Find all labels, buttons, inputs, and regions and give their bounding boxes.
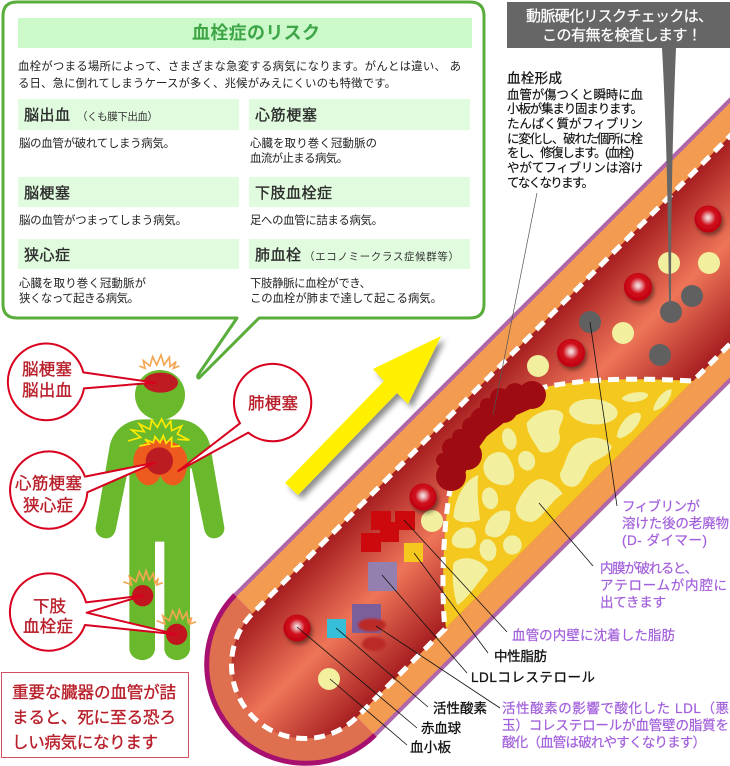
item: myocardial infarction: 心臓を取り巻く冠動脈の xyxy=(250,136,377,150)
vessel wall xyxy=(235,95,730,735)
label: atheroma: 内膜が破れると、 xyxy=(600,561,698,576)
label: deposited fat: 血管の内壁に沈着した脂肪 xyxy=(512,627,675,643)
label: oxidized LDL: 玉）コレステロールが血管壁の脂質を xyxy=(502,718,729,733)
damage mark xyxy=(358,618,386,651)
intro text xyxy=(18,59,461,90)
item: myocardial infarction xyxy=(249,99,470,165)
item: lower limb thrombosis xyxy=(249,177,470,227)
callout bubble: cerebral: 脳出血 xyxy=(22,381,72,400)
text: thrombus formation: 血栓形成 xyxy=(507,71,562,86)
text: thrombus formation: たんぱく質がフィブリン xyxy=(507,116,643,131)
label: fibrin waste: (D- ダイマー) xyxy=(622,533,707,548)
callout bubble: heart: 狭心症 xyxy=(23,496,73,515)
red blood cells xyxy=(284,206,722,642)
leg lesion upper xyxy=(132,585,153,606)
callout bubble: heart: 心筋梗塞 xyxy=(15,474,82,493)
neutral fat squares xyxy=(361,511,415,552)
item: cerebral hemorrhage: 脳の血管が破れてしまう病気。 xyxy=(19,136,175,150)
leg lesion lower xyxy=(166,624,187,645)
atheroma plaque xyxy=(443,379,693,628)
text: thrombus formation xyxy=(507,71,643,190)
label: active oxygen: 活性酸素 xyxy=(433,701,487,716)
item: cerebral infarction xyxy=(18,177,239,227)
upper leg burst xyxy=(123,571,163,585)
outer edge lower xyxy=(375,375,730,735)
item: cerebral hemorrhage xyxy=(18,99,239,150)
callout bubble: legs: 血栓症 xyxy=(23,617,73,636)
fat deposits xyxy=(452,389,672,605)
leader lines xyxy=(297,322,617,745)
lungs xyxy=(133,440,187,485)
lumen xyxy=(231,131,730,739)
lower leg burst xyxy=(157,610,196,624)
intro text: る日、急に倒れてしまうケースが多く、兆候がみえにくいのも特徴です。 xyxy=(18,76,396,90)
warning box: しい病気になります xyxy=(12,733,158,752)
label: oxidized LDL: 活性酸素の影響で酸化した LDL（悪 xyxy=(502,701,729,716)
item: angina: 狭くなって起きる病気。 xyxy=(19,291,139,305)
label: LDL cholesterol: LDLコレステロール xyxy=(471,670,595,685)
item: cerebral hemorrhage: 脳出血 xyxy=(24,107,70,124)
chest burst outer xyxy=(128,419,189,441)
item: myocardial infarction: 心筋梗塞 xyxy=(255,107,317,124)
label: fibrin waste: 溶けた後の老廃物 xyxy=(622,516,729,531)
callout bubble: heart xyxy=(10,451,155,529)
thrombus leader line xyxy=(493,193,537,415)
item: cerebral hemorrhage: （くも膜下出血） xyxy=(77,110,158,123)
grey callout: artery check: この有無を検査します！ xyxy=(542,27,702,44)
head xyxy=(135,370,185,420)
label: atheroma xyxy=(600,561,727,610)
grey callout: artery check xyxy=(507,2,730,305)
chest burst inner xyxy=(139,436,180,447)
heart lesion xyxy=(146,447,173,475)
body xyxy=(96,419,224,660)
heading bar xyxy=(18,18,472,48)
callout bubble: lung: 肺梗塞 xyxy=(248,394,298,413)
item: pulmonary embolism: この血栓が肺まで達して起こる病気。 xyxy=(250,291,442,305)
label: neutral fat: 中性脂肪 xyxy=(494,649,547,664)
thrombus xyxy=(436,381,546,491)
item: pulmonary embolism: 肺血栓 xyxy=(255,247,301,264)
item: pulmonary embolism: 下肢静脈に血栓ができ、 xyxy=(250,276,371,290)
outer edge upper xyxy=(235,95,730,595)
panel outline with speech tail xyxy=(3,2,484,378)
text: thrombus formation: やがてフィブリンは溶け xyxy=(507,160,643,175)
heading: 血栓症のリスク xyxy=(192,23,320,43)
item: cerebral infarction: 脳の血管がつまってしまう病気。 xyxy=(19,213,187,227)
label: red blood cell: 赤血球 xyxy=(421,721,462,736)
item: lower limb thrombosis: 足への血管に詰まる病気。 xyxy=(250,213,383,227)
active oxygen square xyxy=(327,619,346,638)
LDL cholesterol square xyxy=(368,562,397,591)
head burst xyxy=(139,355,179,368)
item: angina xyxy=(18,239,239,305)
item: pulmonary embolism xyxy=(249,239,470,305)
brain lesion xyxy=(143,373,178,393)
item: angina: 狭心症 xyxy=(24,247,70,264)
arrow: yellow direction of flow xyxy=(285,336,441,495)
human figure xyxy=(96,355,224,660)
item: myocardial infarction: 血流が止まる病気。 xyxy=(250,151,348,165)
label: oxidized LDL: 酸化（血管は破れやすくなります） xyxy=(502,735,706,750)
artery illustration xyxy=(207,95,730,763)
callout bubble: lung xyxy=(178,364,311,471)
dashed intima xyxy=(231,131,730,739)
item: lower limb thrombosis: 下肢血栓症 xyxy=(255,185,332,202)
platelets xyxy=(318,252,720,690)
grey callout: artery check: 動脈硬化リスクチェックは、 xyxy=(526,8,713,25)
callout bubble: legs: 下肢 xyxy=(33,597,66,616)
callout bubble: cerebral: 脳梗塞 xyxy=(22,360,72,379)
label: platelet: 血小板 xyxy=(410,740,452,755)
text: thrombus formation: に変化し、破れた個所に栓 xyxy=(507,131,643,146)
item: angina: 心臓を取り巻く冠動脈が xyxy=(19,276,147,290)
deposited fat square xyxy=(404,543,423,562)
label: atheroma: 出てきます xyxy=(600,595,666,610)
intro text: 血栓がつまる場所によって、さまざまな急変する病気になります。がんとは違い、 あ xyxy=(18,59,461,73)
warning box xyxy=(2,672,188,758)
item: pulmonary embolism: （エコノミークラス症候群等） xyxy=(304,250,459,263)
label: oxidized LDL xyxy=(502,701,729,750)
callout bubble: legs xyxy=(10,573,177,651)
warning box: まると、死に至る恐ろ xyxy=(12,709,176,727)
vessel cap xyxy=(207,595,375,763)
text: thrombus formation: をし、修復します。(血栓) xyxy=(507,145,634,160)
label: atheroma: アテロームが内腔に xyxy=(600,578,727,593)
cap edge xyxy=(207,595,375,763)
text: thrombus formation: てなくなります。 xyxy=(507,176,594,190)
warning box: 重要な臓器の血管が詰 xyxy=(12,683,176,702)
panel: blood clot risks xyxy=(3,2,484,378)
text: thrombus formation: 小板が集まり固まります。 xyxy=(507,101,643,116)
item: cerebral infarction: 脳梗塞 xyxy=(24,185,70,202)
label: fibrin waste xyxy=(622,498,729,548)
callout bubble: cerebral xyxy=(8,344,155,420)
oxidized LDL square xyxy=(352,604,381,633)
text: thrombus formation: 血管が傷つくと瞬時に血 xyxy=(507,87,643,102)
fibrin waste particles xyxy=(579,285,703,366)
label: fibrin waste: フィブリンが xyxy=(622,498,700,514)
